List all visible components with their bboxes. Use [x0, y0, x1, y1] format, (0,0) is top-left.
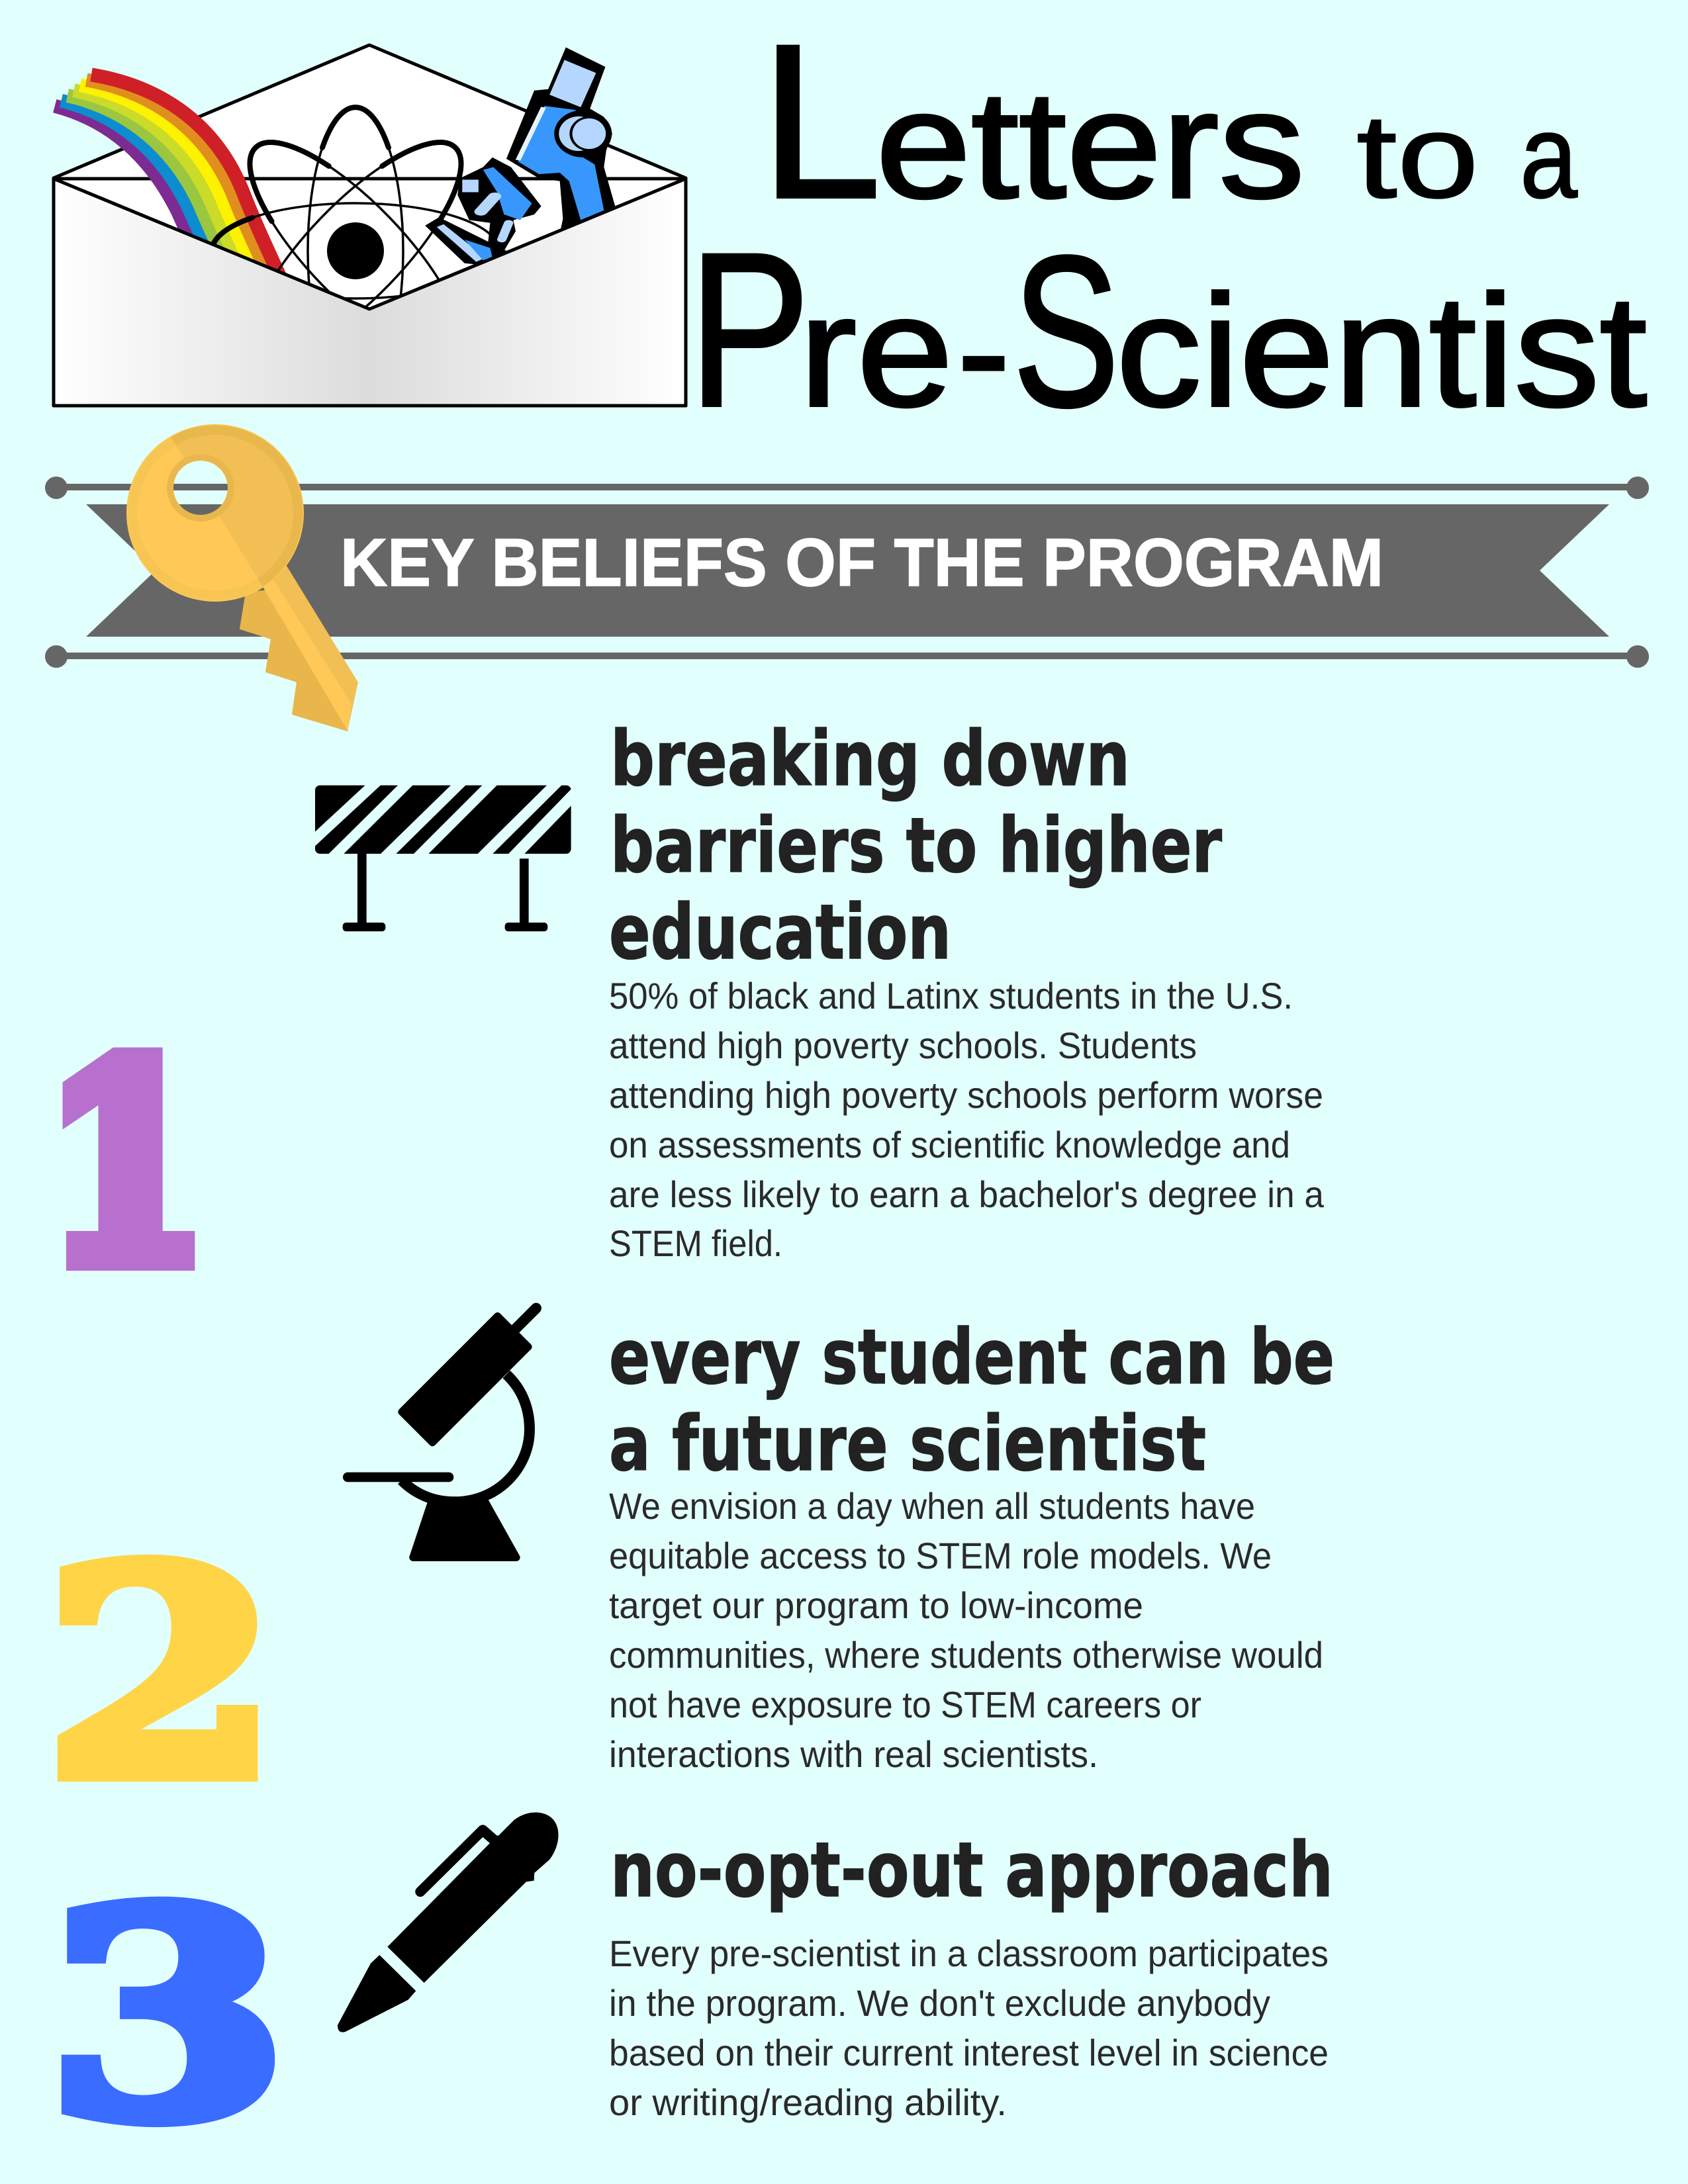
numeral 3: 3: [47, 1849, 287, 2183]
envelope front: [54, 179, 686, 406]
body 1: 50% of black and Latinx students in the U.S.: [609, 975, 1293, 1017]
body 2: equitable access to STEM role models. We: [609, 1535, 1272, 1576]
heading 2: a future scientist: [609, 1400, 1206, 1488]
icon: rainbow: [55, 75, 285, 293]
top rule: [45, 477, 1649, 499]
section 2 text: [609, 1313, 1335, 1775]
title line 1: Letters: [760, 0, 1305, 244]
title: [688, 0, 1647, 453]
title line 1: to a: a: [1520, 90, 1578, 223]
title line 2: Pre-Scientist: -: [957, 262, 1010, 439]
title line 2: Pre-Scientist: re: [799, 262, 953, 439]
heading 1: education: [609, 888, 951, 976]
title line 2: Pre-Scientist: cientist: [1116, 262, 1647, 439]
body 3: Every pre-scientist in a classroom participates: [609, 1933, 1329, 1974]
body 1: on assessments of scientific knowledge and: [609, 1124, 1290, 1165]
title line 2: Pre-Scientist: [688, 207, 1647, 453]
icon: pen: [338, 1812, 559, 2032]
body 2: [609, 1485, 1323, 1775]
body 1: STEM field.: [609, 1222, 782, 1264]
body 3: based on their current interest level in science: [609, 2032, 1329, 2073]
heading 2: every student can be: [609, 1313, 1335, 1401]
heading 1: barriers to higher: [610, 801, 1222, 889]
numeral 2: 2: [44, 1507, 279, 1841]
banner: key beliefs: [45, 477, 1649, 668]
body 1: [609, 975, 1325, 1264]
body 1: attending high poverty schools perform worse: [609, 1074, 1323, 1116]
body 2: target our program to low-income: [609, 1584, 1143, 1626]
section 1 text: [609, 715, 1325, 1264]
title line 1: to a: [1356, 90, 1578, 223]
body 1: attend high poverty schools. Students: [609, 1024, 1197, 1066]
key bow: [126, 424, 304, 602]
icon: road barrier: [315, 783, 574, 931]
heading 1: breaking down: [610, 715, 1130, 803]
body 2: not have exposure to STEM careers or: [609, 1684, 1201, 1725]
heading 2: [609, 1313, 1335, 1488]
body 2: interactions with real scientists.: [609, 1733, 1098, 1775]
icon: blue microscope: [425, 48, 616, 265]
body 3: or writing/reading ability.: [609, 2081, 1007, 2123]
section 3 text: [609, 1826, 1333, 2123]
title line 1: Letters: L: [760, 0, 882, 244]
body 3: in the program. We don't exclude anybody: [609, 1982, 1270, 2024]
title line 1: to a: to: [1356, 90, 1479, 223]
numeral 1: 1: [44, 1007, 208, 1322]
title line 2: Pre-Scientist: P: [688, 207, 810, 453]
title line 1: Letters: etters: [876, 59, 1305, 230]
body 2: We envision a day when all students have: [609, 1485, 1255, 1527]
heading 3: no-opt-out approach: [610, 1826, 1333, 1914]
key teeth: [240, 589, 348, 731]
body 3: [609, 1933, 1329, 2123]
heading 1: [609, 715, 1222, 976]
logo: envelope with rainbow, atom and microscope: [54, 45, 686, 406]
body 1: are less likely to earn a bachelor's degree in a: [609, 1173, 1325, 1215]
bottom rule: [45, 645, 1649, 668]
body 2: communities, where students otherwise would: [609, 1634, 1323, 1676]
icon: atom: [212, 107, 499, 394]
icon: golden key: [126, 424, 358, 731]
ribbon: [86, 504, 1609, 637]
icon: black microscope: [348, 1308, 536, 1557]
banner heading: KEY BELIEFS OF THE PROGRAM: [340, 525, 1383, 600]
key shaft: [262, 566, 358, 731]
title line 2: Pre-Scientist: S: [1013, 211, 1119, 451]
